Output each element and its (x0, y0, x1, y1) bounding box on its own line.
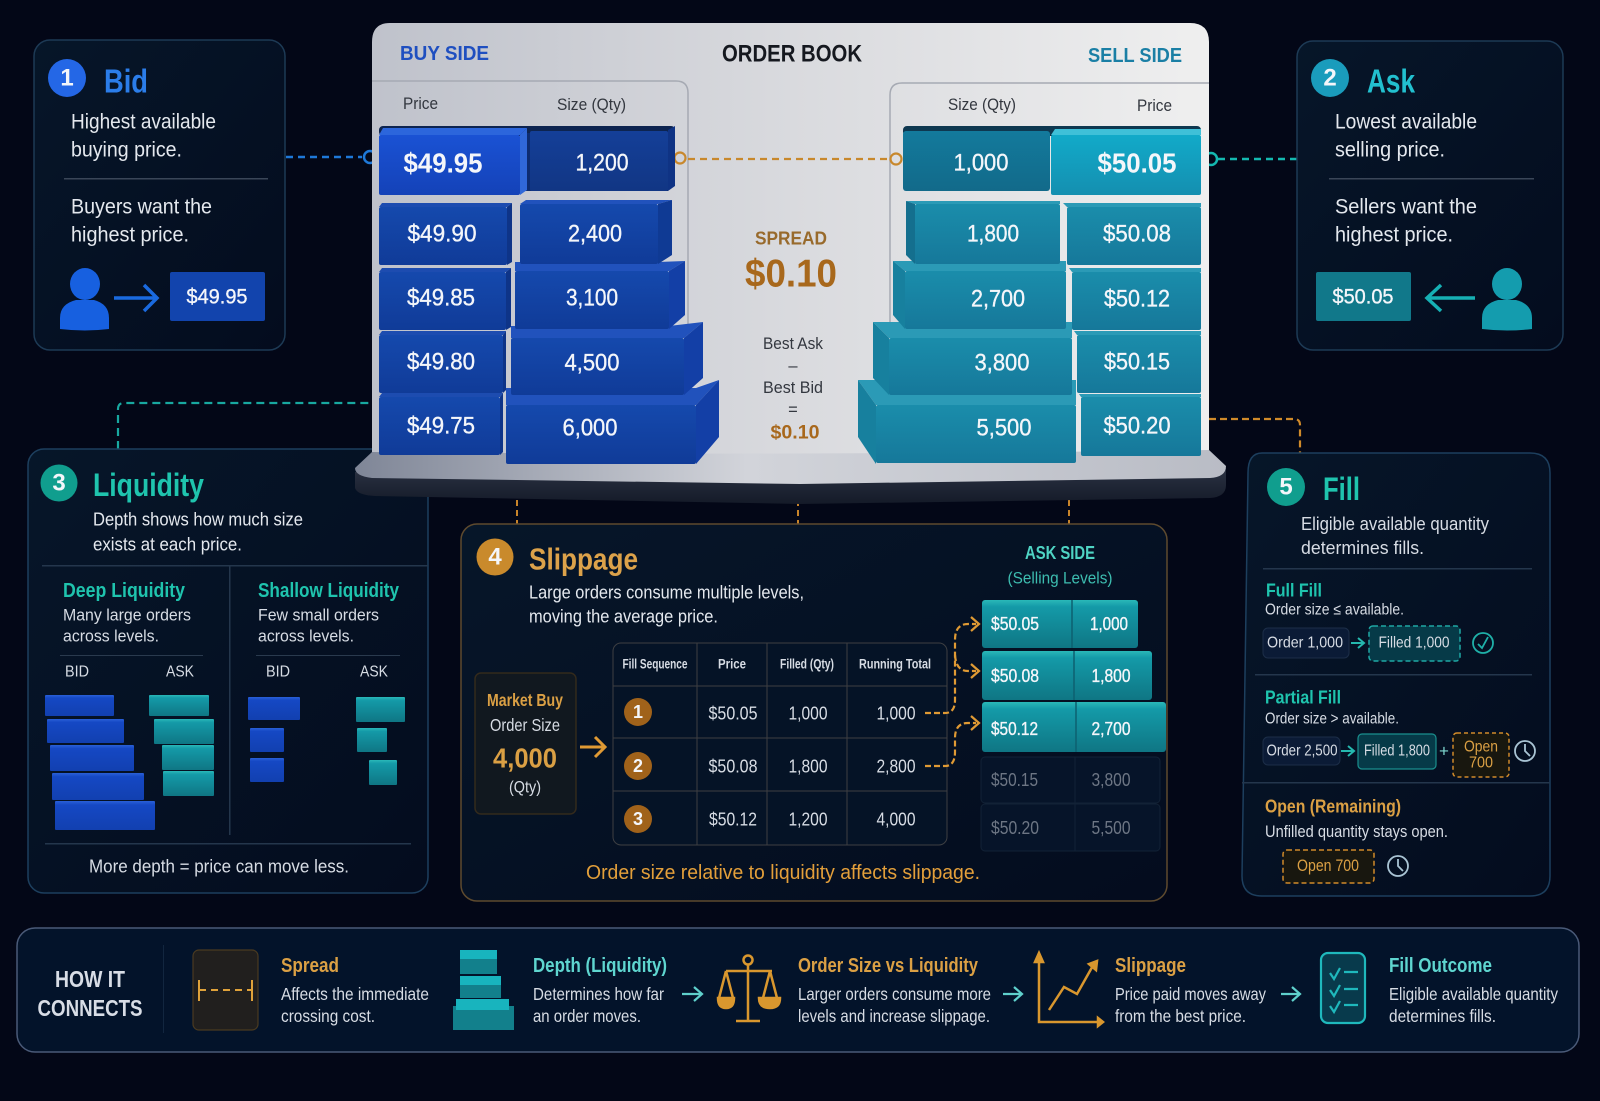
icon: depth stack (453, 950, 514, 1030)
section: full fill (1263, 580, 1493, 661)
section: partial fill: Partial Fill (1265, 686, 1341, 708)
arrow: seller to price (1427, 285, 1475, 311)
table: fill sequence: Price (718, 656, 746, 672)
column headers: Price (403, 95, 438, 113)
section: partial fill: Order size > available. (1265, 710, 1399, 728)
order box: market buy: Market Buy (487, 690, 563, 710)
sell side blocks: $50.15 (1104, 348, 1170, 376)
intro text (1301, 514, 1489, 558)
chart: shallow bid depth (248, 697, 300, 782)
table: fill sequence (613, 643, 947, 845)
price tag (170, 272, 265, 321)
stack: ask levels: 1,800 (1092, 666, 1130, 686)
table: fill sequence: 1,200 (788, 808, 828, 830)
subpanel: shallow liquidity: ASK (360, 664, 388, 680)
icon: checklist (1321, 953, 1365, 1023)
step: depth: Depth (Liquidity) (533, 955, 667, 977)
section: partial fill (1263, 686, 1535, 777)
goal text: highest price. (71, 224, 189, 246)
buy side blocks: $49.75 (407, 412, 475, 440)
step: depth (533, 955, 667, 1026)
definition text: Highest available (71, 110, 216, 134)
heading: Fill: Fill (1323, 471, 1360, 507)
label: sell side: SELL SIDE (1088, 45, 1182, 67)
panel: bid (34, 40, 285, 350)
table: fill sequence: 2,800 (876, 756, 916, 776)
heading: order book: ORDER BOOK (722, 40, 863, 68)
definition text (1335, 110, 1477, 162)
sell side blocks: $50.12 (1104, 286, 1170, 312)
subpanel: deep liquidity (45, 580, 214, 830)
panel: liquidity (28, 449, 428, 893)
panel: order book (355, 23, 1226, 504)
arrow (1003, 987, 1022, 1001)
chart: deep bid depth (45, 695, 155, 830)
column headers: Size (Qty) (948, 96, 1016, 114)
intro text (529, 582, 804, 626)
stack: ask levels: $50.05 (991, 614, 1039, 634)
panel: ask (1297, 41, 1563, 350)
stack: ask levels (981, 600, 1166, 851)
step: spread: Spread (281, 955, 339, 977)
step: depth: Determines how far (533, 984, 664, 1004)
intro text: exists at each price. (93, 534, 242, 554)
table: fill sequence: Fill Sequence (622, 656, 688, 672)
price tag: $49.95 (186, 286, 248, 308)
step: fill outcome: Eligible available quantity (1389, 984, 1558, 1004)
heading: how it connects: HOW IT (55, 966, 125, 992)
buy side blocks: 1,200 (576, 150, 628, 176)
order box: market buy: 4,000 (493, 742, 557, 774)
heading: Slippage: Slippage (529, 542, 638, 576)
buy side blocks: $49.90 (408, 220, 476, 248)
price tag: $50.05 (1332, 286, 1394, 308)
column headers: Size (Qty) (557, 96, 626, 114)
heading: Liquidity: Liquidity (93, 467, 204, 503)
shelf top (355, 450, 1226, 484)
step: order size vs liquidity: levels and increase slippage. (798, 1006, 990, 1026)
section: partial fill: Filled 1,800 (1364, 742, 1430, 760)
number badge 3 (40, 464, 78, 502)
definition text (71, 110, 216, 162)
heading: Ask: Ask (1367, 62, 1416, 100)
section: full fill: Filled 1,000 (1378, 634, 1450, 652)
definition text: Lowest available (1335, 110, 1477, 134)
step: slippage: from the best price. (1115, 1006, 1246, 1026)
sell side blocks: 3,800 (974, 350, 1030, 376)
step: depth: an order moves. (533, 1006, 641, 1026)
subpanel: deep liquidity: Deep Liquidity (63, 580, 186, 602)
section: open remaining: Unfilled quantity stays open. (1265, 823, 1448, 841)
icon: seller (1482, 268, 1532, 330)
table: fill sequence: 1 (633, 702, 643, 722)
goal text: highest price. (1335, 224, 1453, 246)
chart: deep ask depth (149, 695, 214, 796)
icon: spread (193, 950, 258, 1030)
section: open remaining: Open 700 (1297, 857, 1359, 875)
number badge 3: 3 (52, 470, 66, 496)
table: fill sequence: 1,800 (788, 756, 828, 776)
column headers (403, 95, 1172, 115)
spread callout: Best Bid (763, 379, 823, 397)
panel: how it connects (17, 928, 1579, 1052)
section: full fill: Order size ≤ available. (1265, 602, 1404, 618)
step: fill outcome (1389, 955, 1558, 1026)
heading: how it connects: CONNECTS (38, 995, 142, 1021)
subpanel: deep liquidity: across levels. (63, 626, 159, 646)
label: ask side: ASK SIDE (1025, 543, 1095, 563)
spread callout: Best Ask (763, 335, 824, 353)
buy side blocks: $49.80 (407, 348, 475, 376)
subpanel: deep liquidity: Many large orders (63, 606, 191, 624)
sell side blocks: 1,800 (967, 220, 1019, 248)
section: open remaining (1265, 796, 1448, 883)
icon: check (1473, 633, 1493, 653)
spread callout: = (788, 401, 798, 419)
sell side blocks: 1,000 (954, 150, 1008, 176)
subpanel: shallow liquidity (248, 580, 405, 785)
takeaway text: Order size relative to liquidity affects slippage. (586, 862, 980, 884)
icon: slippage chart (1035, 953, 1103, 1026)
sell side blocks: 2,700 (971, 286, 1025, 312)
spread callout (745, 228, 837, 444)
number badge 1 (48, 59, 86, 97)
definition text: selling price. (1335, 138, 1445, 162)
heading: Bid: Bid (104, 62, 148, 100)
stack: ask levels: $50.12 (991, 719, 1038, 739)
goal text (1335, 196, 1477, 246)
step: fill outcome: Fill Outcome (1389, 955, 1492, 977)
sell side blocks (858, 126, 1201, 464)
subpanel: shallow liquidity: Shallow Liquidity (258, 580, 400, 602)
price tag (1316, 272, 1411, 321)
takeaway text: More depth = price can move less. (89, 856, 349, 876)
goal text (71, 196, 212, 246)
sell side blocks: $50.20 (1104, 412, 1170, 440)
arrow: order to table (580, 737, 605, 757)
step: slippage: Slippage (1115, 955, 1186, 977)
step: spread: Affects the immediate (281, 984, 429, 1004)
subpanel: shallow liquidity: Few small orders (258, 606, 379, 624)
table: fill sequence: 4,000 (876, 808, 916, 830)
buy side blocks: $49.95 (404, 148, 482, 178)
step: fill outcome: determines fills. (1389, 1006, 1496, 1026)
icon: buyer (60, 268, 109, 330)
sell side blocks: $50.08 (1103, 220, 1171, 248)
table: fill sequence: $50.12 (709, 808, 757, 830)
intro text: moving the average price. (529, 606, 718, 626)
number badge 2 (1311, 59, 1349, 97)
buy side blocks: 3,100 (566, 284, 618, 312)
stack: ask levels: $50.08 (991, 666, 1039, 686)
stack: ask levels: 3,800 (1092, 770, 1130, 790)
connector: bid to book (286, 151, 376, 163)
buy side blocks: 6,000 (562, 414, 618, 442)
step: spread: crossing cost. (281, 1006, 375, 1026)
sell side blocks: $50.05 (1098, 148, 1176, 178)
number badge 4 (476, 538, 514, 576)
step: order size vs liquidity (798, 955, 991, 1026)
step: slippage (1115, 955, 1266, 1026)
subpanel: deep liquidity: BID (65, 664, 89, 680)
heading: how it connects (38, 966, 142, 1021)
label: ask side: (Selling Levels) (1008, 568, 1112, 588)
spread callout: – (788, 357, 798, 375)
step: order size vs liquidity: Larger orders consume more (798, 984, 991, 1004)
number badge 2: 2 (1323, 64, 1337, 92)
arrow (682, 987, 702, 1001)
section: open remaining: Open (Remaining) (1265, 796, 1401, 816)
intro text: determines fills. (1301, 538, 1424, 558)
label: ask side (1008, 543, 1112, 588)
icon: clock (1388, 856, 1408, 876)
spread callout: $0.10 (770, 422, 820, 444)
connector: slippage to book (517, 480, 1069, 524)
buy side blocks: 4,500 (564, 350, 620, 376)
sell side blocks: 5,500 (976, 414, 1032, 442)
buy side blocks: $49.85 (407, 284, 475, 312)
connector: ask to book (1205, 153, 1297, 165)
table: fill sequence: 3 (633, 809, 643, 829)
arrows: fills to ask levels (925, 617, 979, 766)
book board (372, 23, 1209, 470)
stack: ask levels: $50.20 (991, 818, 1039, 838)
order box: market buy: Order Size (490, 715, 560, 735)
section: partial fill: 700 (1469, 754, 1493, 772)
spread callout: $0.10 (745, 252, 837, 296)
spread callout: SPREAD (755, 228, 827, 248)
section: full fill: Order 1,000 (1267, 634, 1343, 652)
label: buy side: BUY SIDE (400, 43, 489, 65)
table: fill sequence: Filled (Qty) (780, 656, 834, 672)
stack: ask levels: 5,500 (1092, 818, 1130, 838)
intro text: Depth shows how much size (93, 508, 303, 530)
icon: clock (1515, 741, 1535, 761)
number badge 1: 1 (60, 64, 74, 92)
buy side blocks (379, 126, 719, 464)
number badge 5 (1267, 468, 1305, 506)
number badge 5: 5 (1279, 474, 1293, 500)
connector: liquidity to book (118, 403, 372, 449)
definition text: buying price. (71, 138, 182, 162)
subpanel: shallow liquidity: across levels. (258, 626, 354, 646)
arrow: buyer to price (114, 285, 157, 311)
panel: slippage (461, 524, 1167, 901)
shelf base (355, 468, 1226, 504)
connector: spread line (674, 152, 902, 164)
column headers: Price (1137, 97, 1172, 115)
section: partial fill: + (1439, 742, 1449, 760)
buy side blocks: 2,400 (568, 220, 622, 248)
subpanel: shallow liquidity: BID (266, 664, 290, 680)
section: full fill: Full Fill (1266, 580, 1322, 600)
section: partial fill: Order 2,500 (1266, 742, 1338, 760)
step: spread (281, 955, 429, 1026)
step: slippage: Price paid moves away (1115, 984, 1266, 1004)
table: fill sequence: 1,000 (876, 702, 916, 724)
chart: shallow ask depth (356, 697, 405, 785)
connector: fill to book (1209, 419, 1300, 453)
table: fill sequence: 1,000 (788, 702, 828, 724)
order box: market buy (475, 673, 576, 814)
arrow (1281, 987, 1300, 1001)
goal text: Buyers want the (71, 196, 212, 218)
step: order size vs liquidity: Order Size vs Liquidity (798, 955, 979, 977)
panel: fill (1242, 453, 1550, 896)
table: fill sequence: Running Total (859, 656, 931, 672)
intro text: Large orders consume multiple levels, (529, 582, 804, 602)
goal text: Sellers want the (1335, 196, 1477, 218)
section: partial fill: Open (1464, 738, 1498, 756)
table: fill sequence: 2 (633, 756, 643, 776)
table: fill sequence: $50.08 (708, 756, 758, 776)
stack: ask levels: 1,000 (1090, 614, 1128, 634)
stack: ask levels: 2,700 (1092, 719, 1130, 739)
intro text (93, 508, 303, 554)
intro text: Eligible available quantity (1301, 514, 1489, 534)
table: fill sequence: $50.05 (708, 702, 758, 724)
subpanel: deep liquidity: ASK (166, 664, 194, 680)
number badge 4: 4 (488, 544, 502, 570)
stack: ask levels: $50.15 (991, 770, 1038, 790)
order box: market buy: (Qty) (509, 778, 541, 796)
icon: scales (718, 956, 780, 1021)
